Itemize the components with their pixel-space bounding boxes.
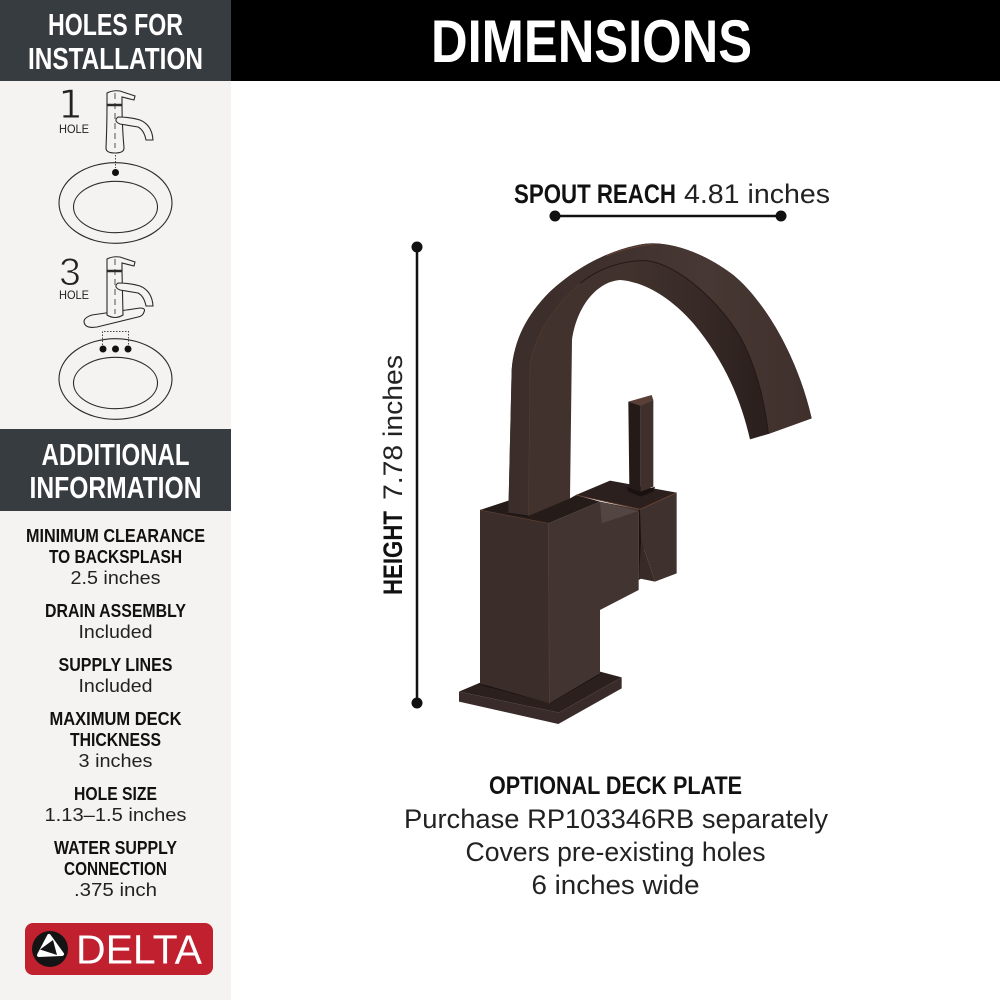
diagram: one hole installation	[58, 83, 172, 243]
spec: water supply connection: WATER SUPPLY	[54, 838, 177, 858]
label: HEIGHT	[378, 511, 408, 595]
header: additional information: INFORMATION	[30, 470, 202, 505]
dimension: spout reach: 4.81 inches	[684, 179, 830, 209]
icon: delta mark	[32, 931, 68, 967]
body	[480, 495, 640, 703]
callout: optional deck plate	[404, 772, 828, 900]
spec: minimum clearance: TO BACKSPLASH	[49, 547, 182, 567]
spec: minimum clearance	[26, 526, 205, 588]
logo: delta: DELTA	[76, 926, 203, 972]
spec: maximum deck thickness: 3 inches	[78, 751, 152, 771]
spec: minimum clearance: 2.5 inches	[70, 568, 160, 588]
handle block	[576, 481, 677, 582]
spec: hole size: 1.13–1.5 inches	[44, 805, 186, 825]
spec: drain assembly	[45, 601, 186, 642]
measure line	[555, 215, 781, 217]
spec: supply lines	[58, 655, 172, 696]
label: 3 hole	[59, 251, 89, 302]
label: 3 hole: HOLE	[59, 288, 89, 302]
label: 1 hole: HOLE	[59, 122, 89, 136]
specification list	[26, 526, 205, 900]
dimension: height	[378, 242, 422, 708]
spec: water supply connection: CONNECTION	[64, 859, 167, 879]
header: holes for installation: INSTALLATION	[28, 41, 203, 76]
spec: water supply connection	[54, 838, 177, 900]
dashed connector	[114, 155, 116, 168]
spec: maximum deck thickness: MAXIMUM DECK	[50, 709, 182, 729]
dimension: spout reach	[514, 179, 830, 222]
logo: delta	[25, 923, 213, 975]
header: dimensions	[231, 0, 1000, 81]
callout: optional deck plate: Covers pre-existing holes	[466, 837, 766, 867]
spec: maximum deck thickness: THICKNESS	[70, 730, 161, 750]
callout: optional deck plate: 6 inches wide	[532, 870, 700, 900]
spec: hole size: HOLE SIZE	[74, 784, 157, 804]
spec: drain assembly: DRAIN ASSEMBLY	[45, 601, 186, 621]
spec: minimum clearance: MINIMUM CLEARANCE	[26, 526, 205, 546]
sidebar background	[0, 0, 231, 1000]
label: 1 hole	[58, 83, 89, 136]
callout: optional deck plate: OPTIONAL DECK PLATE	[489, 772, 742, 800]
icon: sink	[59, 339, 172, 419]
header: additional information	[0, 429, 231, 511]
spec: maximum deck thickness	[50, 709, 182, 771]
header: holes for installation	[0, 0, 231, 81]
header: holes for installation: HOLES FOR	[48, 7, 183, 42]
spec: supply lines: Included	[78, 676, 152, 696]
label	[378, 355, 408, 595]
callout: optional deck plate: Purchase RP103346RB separately	[404, 804, 828, 834]
spout	[508, 243, 812, 516]
dashed connector	[102, 332, 128, 345]
spec: hole size	[44, 784, 186, 825]
hole dot	[112, 169, 119, 176]
spec: supply lines: SUPPLY LINES	[58, 655, 172, 675]
hole dots	[100, 346, 132, 352]
header: additional information: ADDITIONAL	[42, 437, 190, 472]
label: 1 hole: 1	[58, 83, 83, 128]
diagram: three hole installation	[59, 251, 172, 419]
faucet photo	[459, 243, 812, 724]
label: SPOUT REACH	[514, 179, 676, 209]
base plate	[459, 672, 622, 724]
icon: faucet with deck plate	[84, 257, 153, 327]
label: 7.78 inches	[378, 355, 408, 500]
icon: sink	[59, 163, 172, 243]
header: dimensions: DIMENSIONS	[431, 8, 752, 75]
icon: faucet	[106, 91, 153, 153]
measure line	[416, 247, 418, 703]
spec: drain assembly: Included	[78, 622, 152, 642]
handle lever	[627, 395, 655, 497]
spec: water supply connection: .375 inch	[74, 880, 157, 900]
label: 3 hole: 3	[59, 251, 81, 294]
